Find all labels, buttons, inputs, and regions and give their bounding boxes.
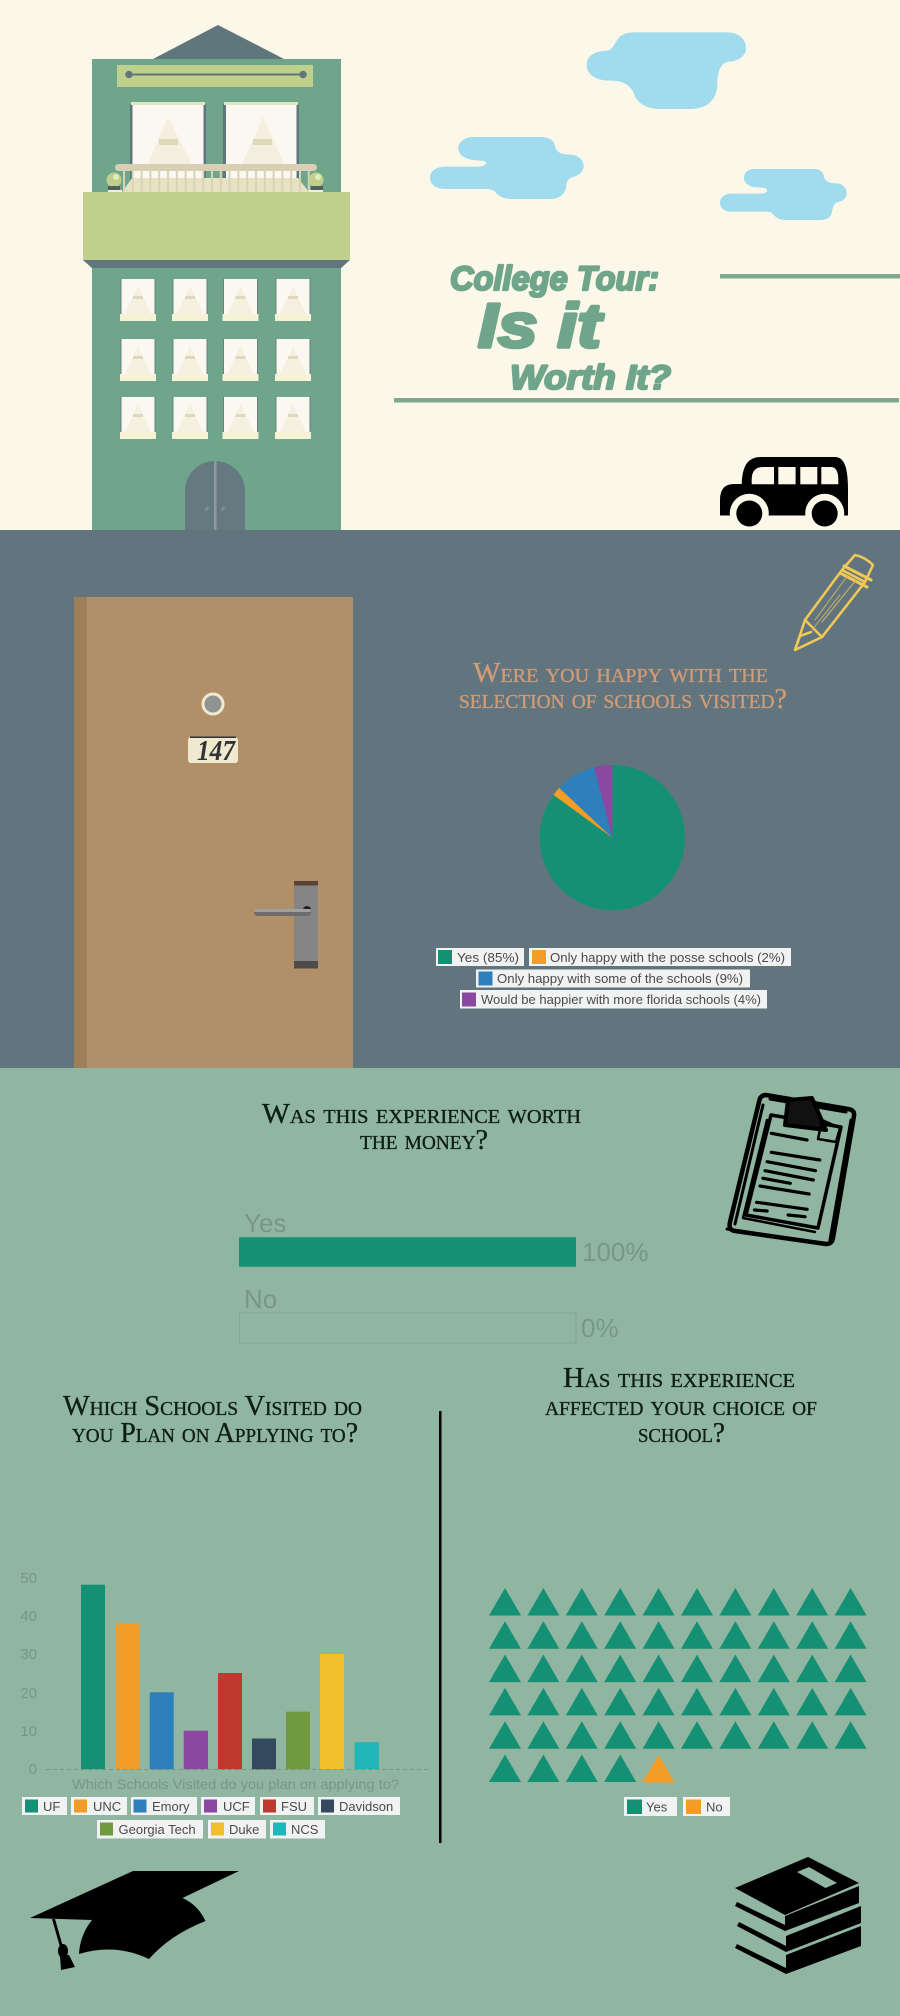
heading: happiness question: Were you happy with the xyxy=(473,657,768,689)
legend: pie chart: Only happy with some of the schools (9%) xyxy=(497,971,743,986)
legend: schools: Emory xyxy=(152,1799,190,1814)
bar chart: schools applying to xyxy=(20,1570,430,1792)
illustration: hotel door: 147 xyxy=(197,735,236,767)
bar chart: schools applying to: 20 xyxy=(20,1685,37,1702)
bar chart: schools applying to: 40 xyxy=(20,1608,37,1625)
panel: survey results xyxy=(0,1068,900,2016)
icon: graduation cap xyxy=(30,1871,239,1970)
heading: affected choice: Has this experience xyxy=(563,1362,795,1394)
heading: schools applying to xyxy=(63,1390,362,1449)
icon: pencil xyxy=(795,555,873,650)
heading: affected choice: affected your choice of xyxy=(545,1390,817,1422)
legend: schools xyxy=(22,1797,400,1838)
legend: yes no xyxy=(624,1797,730,1816)
panel: door and happiness pie chart xyxy=(0,530,900,1068)
legend: pie chart xyxy=(436,948,791,1008)
bar chart: schools applying to: 0 xyxy=(29,1761,37,1778)
bar chart: worth the money: 100% xyxy=(582,1237,648,1267)
icon: clouds xyxy=(430,32,847,220)
heading: happiness question: selection of schools visited? xyxy=(459,683,787,715)
bar chart: worth the money: 0% xyxy=(581,1313,619,1343)
legend: yes no: No xyxy=(706,1800,723,1814)
legend: schools: UF xyxy=(43,1799,60,1814)
illustration: hotel door xyxy=(74,597,353,1068)
legend: schools: UNC xyxy=(93,1799,121,1814)
legend: pie chart: Yes (85%) xyxy=(457,950,519,965)
illustration: apartment building xyxy=(83,25,350,530)
bar chart: worth the money: Yes xyxy=(244,1208,286,1238)
title: College Tour: xyxy=(450,260,659,298)
heading: affected choice: school? xyxy=(638,1417,725,1449)
pie chart xyxy=(540,765,685,910)
legend: yes no: Yes xyxy=(646,1800,668,1814)
legend: schools: UCF xyxy=(223,1799,250,1814)
legend: schools: Duke xyxy=(229,1822,259,1837)
title: Is it xyxy=(478,292,604,361)
heading: worth the money xyxy=(262,1098,581,1156)
bar chart: schools applying to: Which Schools Visited do you plan on applying to? xyxy=(72,1776,399,1792)
panel: header with building and title xyxy=(0,0,900,533)
icon: stack of books xyxy=(735,1857,861,1974)
heading: affected choice xyxy=(545,1362,817,1449)
icon: clipboard sketch xyxy=(727,1095,854,1244)
legend: schools: Davidson xyxy=(339,1799,393,1814)
bar chart: worth the money: No xyxy=(244,1284,277,1314)
title xyxy=(450,260,671,397)
heading: schools applying to: Which Schools Visited do xyxy=(63,1390,362,1422)
heading: happiness question xyxy=(459,657,787,715)
bar chart: schools applying to: 50 xyxy=(20,1570,37,1587)
legend: schools: Georgia Tech xyxy=(118,1822,196,1837)
title: Worth It? xyxy=(510,359,671,397)
pictogram chart: triangles xyxy=(489,1588,867,1782)
heading: worth the money: the money? xyxy=(360,1124,488,1156)
bar chart: schools applying to: 10 xyxy=(20,1723,37,1740)
heading: schools applying to: you Plan on Applying to? xyxy=(72,1417,358,1449)
bar chart: schools applying to: 30 xyxy=(20,1646,37,1663)
legend: schools: FSU xyxy=(281,1799,307,1814)
legend: pie chart: Would be happier with more florida schools (4%) xyxy=(481,992,761,1007)
heading: worth the money: Was this experience worth xyxy=(262,1098,581,1130)
icon: bus xyxy=(720,457,852,533)
legend: pie chart: Only happy with the posse schools (2%) xyxy=(550,950,785,965)
bar chart: worth the money xyxy=(239,1208,648,1343)
legend: schools: NCS xyxy=(291,1822,319,1837)
